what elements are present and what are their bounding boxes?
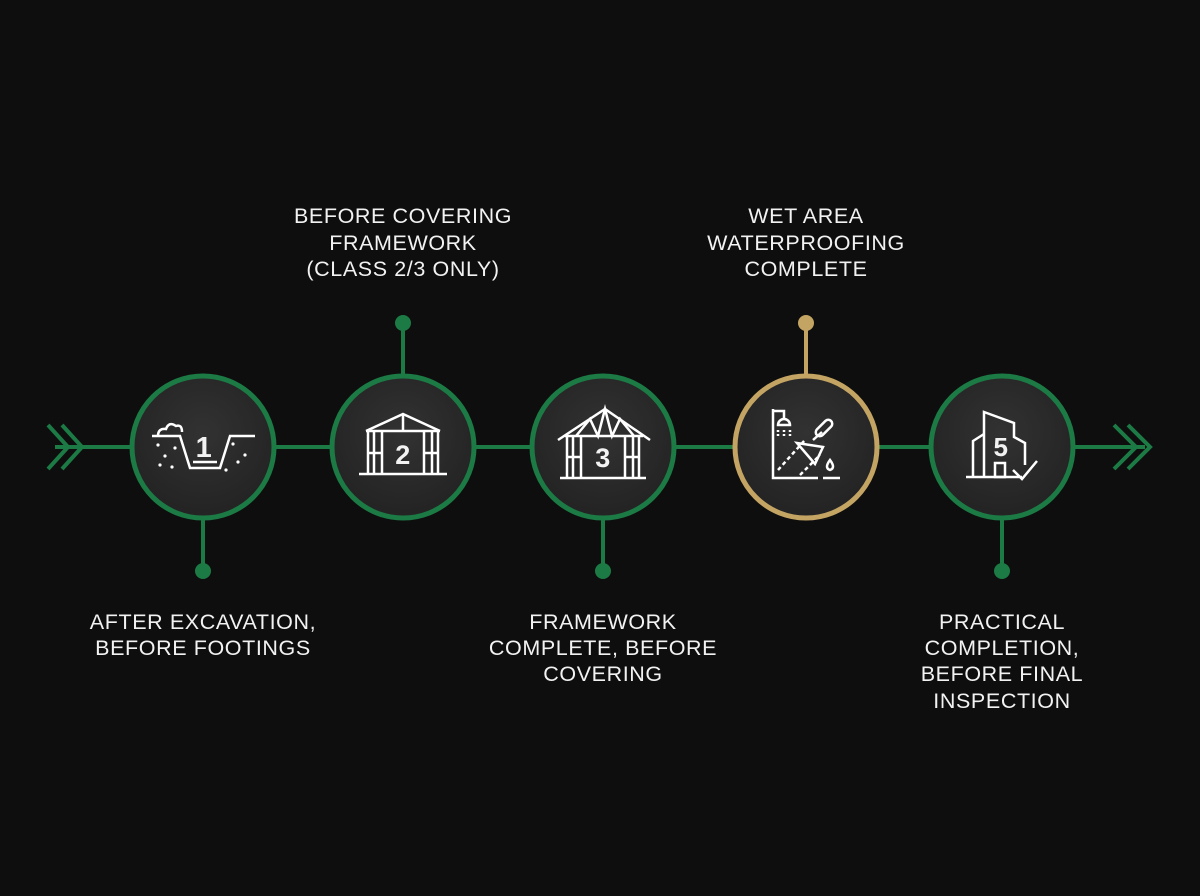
icon: truss house 3 xyxy=(558,409,650,478)
label 4: WET AREA xyxy=(748,204,864,228)
step 3 xyxy=(532,376,674,579)
label 3: COMPLETE, BEFORE xyxy=(489,636,717,660)
step 1: 1 xyxy=(196,432,212,464)
step 5 xyxy=(931,376,1073,579)
step 2: 2 xyxy=(395,440,411,470)
label 2: BEFORE COVERING xyxy=(294,204,512,228)
arrow: right chevrons xyxy=(1114,425,1150,469)
label 5: BEFORE FINAL xyxy=(921,662,1083,686)
label 4: COMPLETE xyxy=(744,257,868,281)
step 1 xyxy=(132,376,274,579)
label 1 xyxy=(90,610,316,660)
icon: shower and trowel xyxy=(773,409,840,478)
label 2: (CLASS 2/3 ONLY) xyxy=(306,257,500,281)
icon: frame house 2 xyxy=(359,414,447,474)
label 4 xyxy=(707,204,905,281)
arrow: left chevrons xyxy=(48,425,82,469)
label 3 xyxy=(489,610,717,686)
label 1: AFTER EXCAVATION, xyxy=(90,610,316,634)
step 3: 3 xyxy=(595,443,611,473)
label 2: FRAMEWORK xyxy=(329,231,477,255)
label 1: BEFORE FOOTINGS xyxy=(95,636,311,660)
label 5: COMPLETION, xyxy=(925,636,1079,660)
icon: excavation xyxy=(152,424,255,468)
label 5 xyxy=(921,610,1083,713)
label 4: WATERPROOFING xyxy=(707,231,905,255)
step 4 xyxy=(735,315,877,518)
label 3: COVERING xyxy=(543,662,663,686)
label 5: INSPECTION xyxy=(933,689,1071,713)
timeline line xyxy=(55,445,1145,449)
step 2 xyxy=(332,315,474,518)
icon: building with check xyxy=(966,412,1037,479)
label 2 xyxy=(294,204,512,281)
label 5: PRACTICAL xyxy=(939,610,1065,634)
step 5: 5 xyxy=(993,432,1009,462)
label 3: FRAMEWORK xyxy=(529,610,677,634)
